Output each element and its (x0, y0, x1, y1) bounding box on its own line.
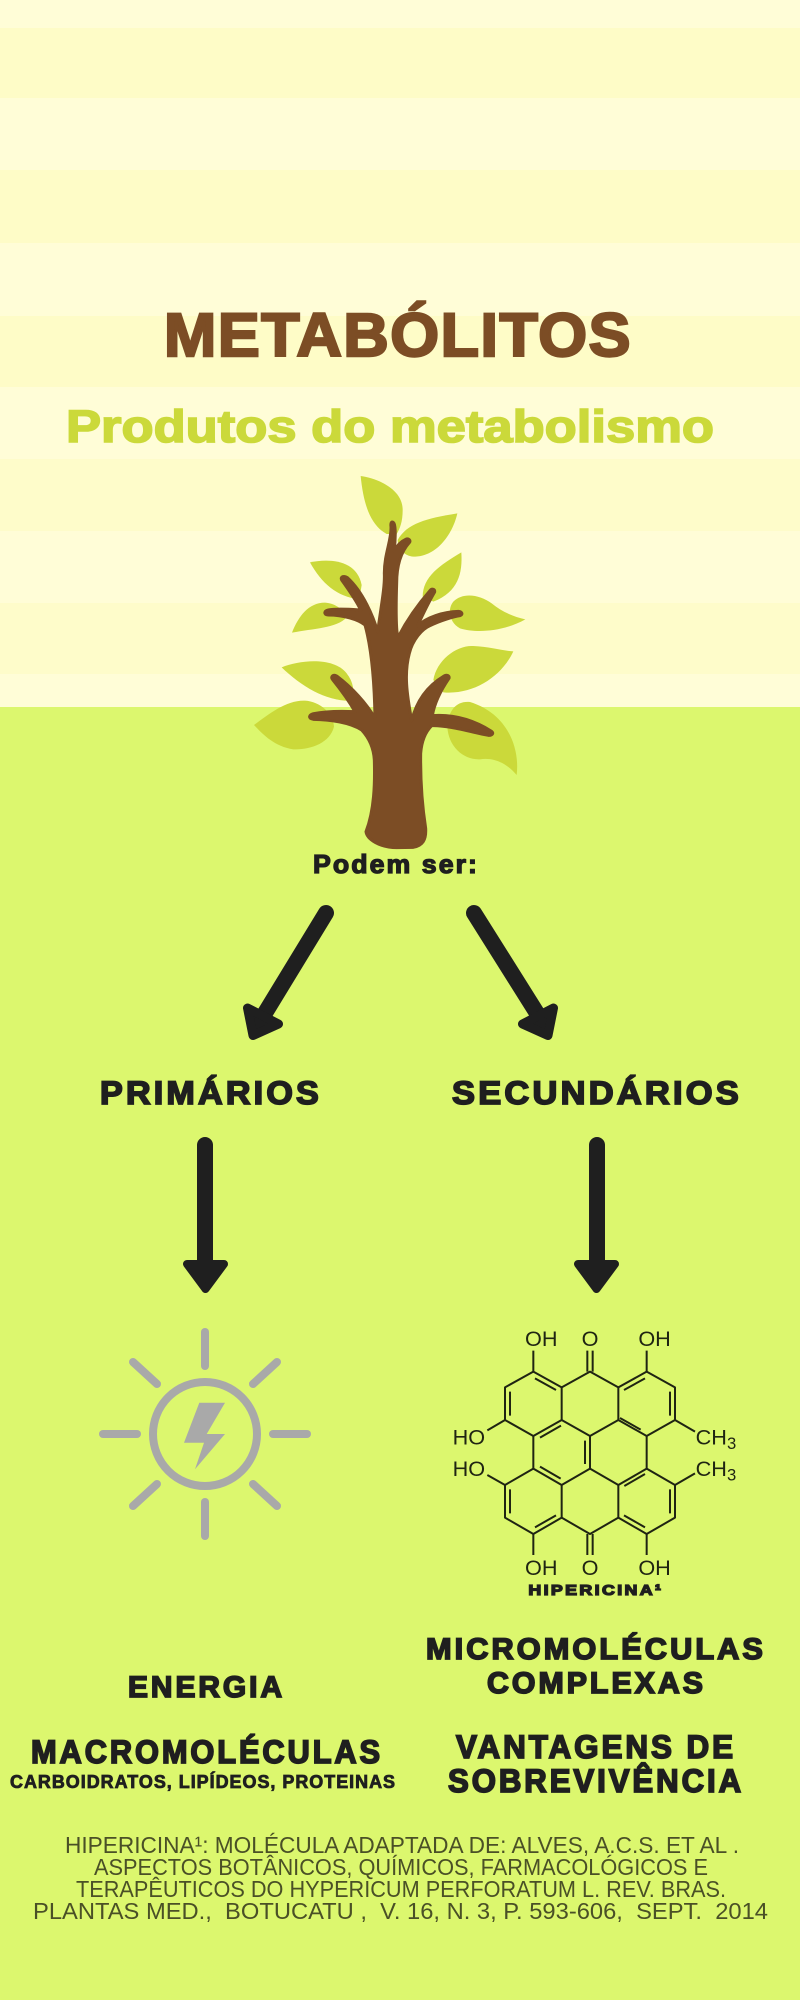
atom labels (453, 1326, 736, 1580)
text: micromoléculas complexas: MICROMOLÉCULAS (426, 1632, 766, 1666)
label: podem ser: Podem ser: (313, 849, 479, 879)
trunk and branches (310, 522, 493, 848)
text: micromoléculas complexas (426, 1632, 766, 1700)
reference text (33, 1832, 768, 1924)
reference text: TERAPÊUTICOS DO HYPERICUM PERFORATUM L. REV. BRAS. (76, 1876, 726, 1902)
atom labels: CH (696, 1425, 727, 1450)
arrow: to secundários (474, 913, 554, 1036)
arrow: secundários down (578, 1145, 615, 1289)
heading: secundários: SECUNDÁRIOS (452, 1075, 742, 1111)
atom labels: OH (525, 1555, 557, 1580)
arrow: primários down (187, 1145, 224, 1289)
atom labels: OH (525, 1326, 557, 1351)
atom labels: OH (638, 1555, 671, 1580)
text: vantagens de sobrevivência (448, 1729, 744, 1799)
icon: sun with lightning bolt (103, 1332, 307, 1536)
icon: tree (254, 476, 525, 848)
text: macromoléculas (10, 1734, 396, 1792)
atom labels: CH (696, 1456, 727, 1481)
bonds (487, 1351, 695, 1555)
chemical structure: hypericin (453, 1326, 736, 1599)
heading: primários: PRIMÁRIOS (100, 1075, 322, 1111)
atom labels: O (582, 1326, 599, 1351)
text: vantagens de sobrevivência: SOBREVIVÊNCIA (448, 1763, 744, 1799)
reference text: PLANTAS MED., BOTUCATU , V. 16, N. 3, P. 593-606, SEPT. 2014 (33, 1898, 768, 1924)
atom labels: O (582, 1555, 599, 1580)
subtitle: Produtos do metabolismo (66, 401, 714, 452)
text: vantagens de sobrevivência: VANTAGENS DE (456, 1729, 736, 1765)
text: macromoléculas: MACROMOLÉCULAS (31, 1734, 383, 1770)
text: macromoléculas: CARBOIDRATOS, LIPÍDEOS, PROTEINAS (10, 1771, 396, 1792)
reference text: ASPECTOS BOTÂNICOS, QUÍMICOS, FARMACOLÓGICOS E (94, 1854, 708, 1880)
leaves (254, 476, 525, 775)
atom labels: 3 (727, 1434, 736, 1453)
atom labels: OH (638, 1326, 671, 1351)
text: micromoléculas complexas: COMPLEXAS (487, 1667, 706, 1700)
caption: hipericina: HIPERICINA¹ (528, 1582, 663, 1599)
arrow: to primários (248, 913, 326, 1036)
atom labels: HO (453, 1425, 485, 1450)
atom labels: 3 (727, 1465, 736, 1484)
title: METABÓLITOS (164, 301, 632, 369)
atom labels: HO (453, 1456, 485, 1481)
reference text: HIPERICINA¹: MOLÉCULA ADAPTADA DE: ALVES, A.C.S. ET AL . (65, 1832, 739, 1858)
text: energia: ENERGIA (128, 1671, 285, 1704)
